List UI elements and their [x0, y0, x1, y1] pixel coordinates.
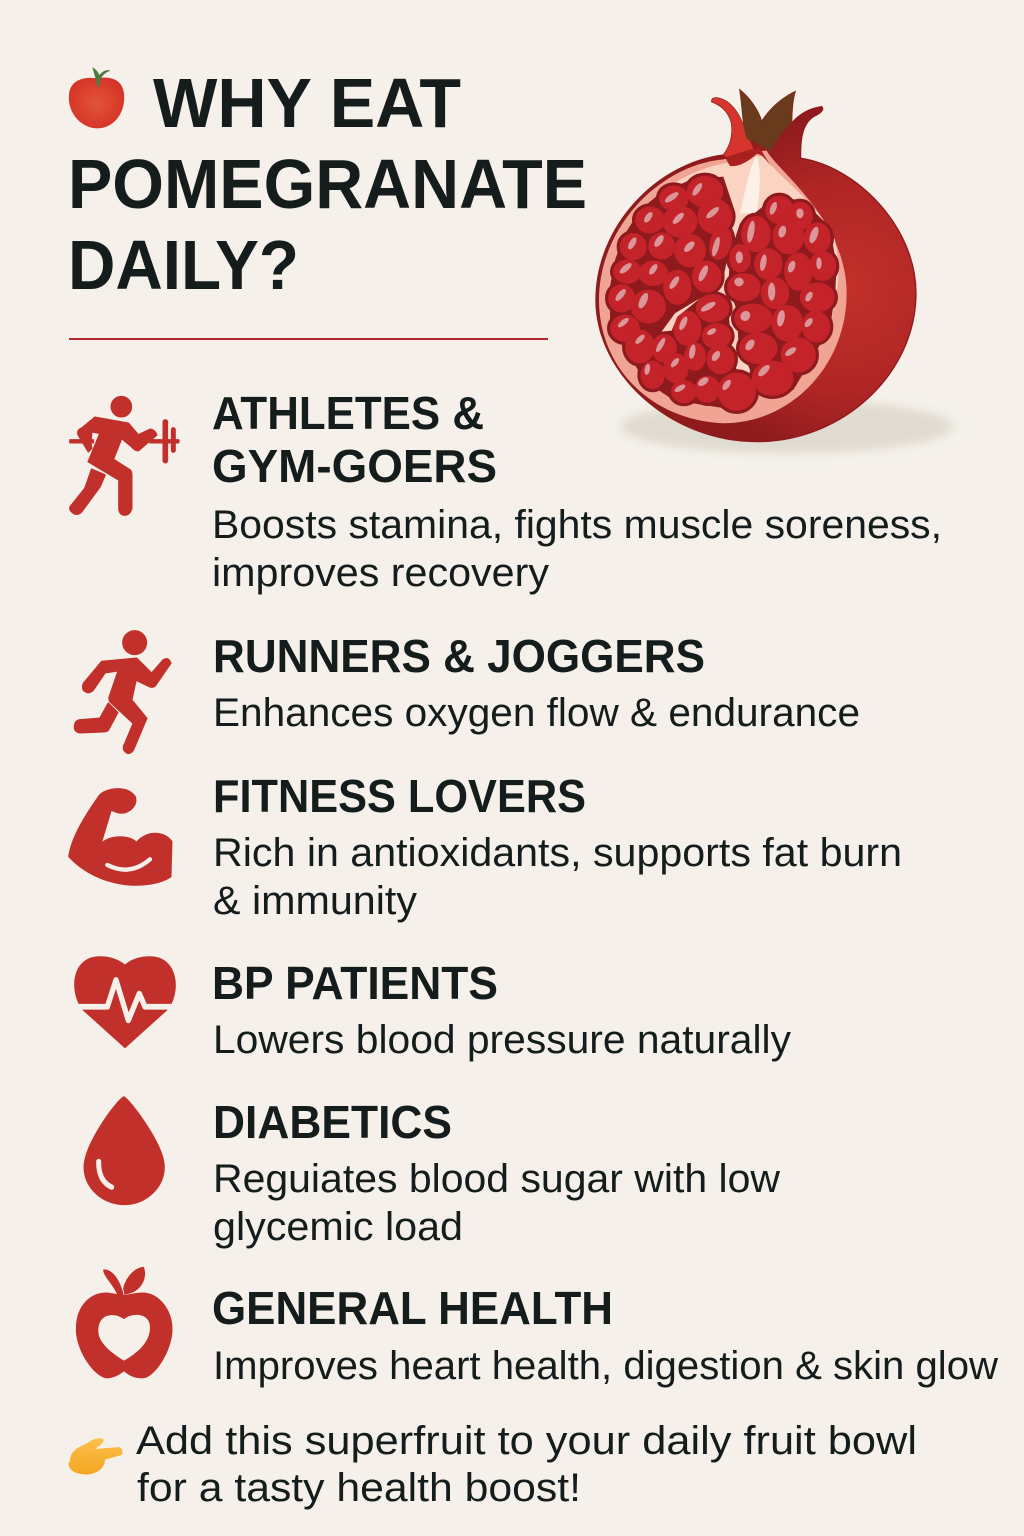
description: & immunity [213, 879, 417, 923]
item: diabetics [84, 1096, 780, 1249]
heading: FITNESS LOVERS [213, 770, 586, 822]
icon: blood drop [84, 1097, 164, 1204]
title: WHY EAT [153, 64, 461, 142]
rind [596, 90, 916, 442]
icon: heart with pulse [74, 957, 177, 1047]
call to action text [136, 1419, 917, 1510]
icon: apple with heart [77, 1268, 172, 1377]
description: Rich in antioxidants, supports fat burn [213, 831, 902, 875]
icon: runner [75, 631, 171, 753]
icon: flexed bicep [69, 789, 172, 885]
item: bp patients [74, 957, 791, 1062]
title: DAILY? [68, 226, 299, 304]
seed mass left [610, 177, 755, 410]
icon: red fruit [69, 67, 124, 128]
ground shadow [620, 400, 953, 453]
heading: ATHLETES & [212, 387, 484, 439]
heading: GYM-GOERS [212, 440, 497, 492]
item: general health [77, 1268, 998, 1388]
description: Enhances oxygen flow & endurance [213, 691, 860, 735]
illustration: halved pomegranate [596, 90, 953, 453]
description: Boosts stamina, fights muscle soreness, [212, 503, 942, 547]
item: fitness lovers [69, 770, 902, 923]
heading: BP PATIENTS [212, 957, 498, 1009]
call to action text: Add this superfruit to your daily fruit bowl [136, 1419, 917, 1463]
crown left petal [712, 98, 753, 163]
description [213, 831, 902, 923]
seed mass right [728, 195, 837, 390]
heading: DIABETICS [213, 1096, 452, 1148]
heading: RUNNERS & JOGGERS [213, 630, 705, 682]
description [212, 503, 942, 595]
seeds [609, 177, 835, 410]
description [213, 1157, 780, 1249]
pith [613, 155, 838, 400]
call to action text: for a tasty health boost! [137, 1466, 581, 1510]
description: Improves heart health, digestion & skin glow [213, 1344, 998, 1388]
title: POMEGRANATE [68, 145, 587, 223]
small pith gap [662, 298, 700, 332]
description: Lowers blood pressure naturally [213, 1018, 791, 1062]
cut face [599, 151, 847, 423]
heading: GENERAL HEALTH [212, 1282, 613, 1334]
footer callout [68, 1419, 917, 1510]
seed highlights [614, 182, 822, 394]
crown leaves [740, 90, 795, 152]
item: athletes and gym-goers [70, 387, 942, 595]
neck shading [725, 148, 772, 167]
centre highlight [740, 155, 760, 213]
icon: pointing hand [68, 1438, 123, 1475]
description: glycemic load [213, 1205, 463, 1249]
item: runners and joggers [75, 630, 860, 753]
title [68, 64, 587, 304]
description: improves recovery [212, 551, 549, 595]
description: Reguiates blood sugar with low [213, 1157, 780, 1201]
icon: athlete with dumbbell [70, 397, 179, 515]
heading [212, 387, 497, 492]
